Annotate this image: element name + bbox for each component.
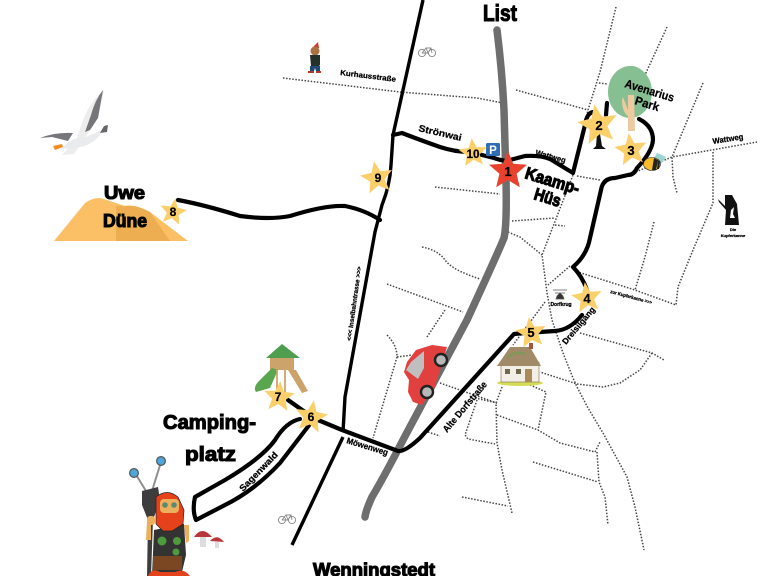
road label: Wattweg center: Wattweg [534,148,567,165]
heading: Avenarius Park: Avenarius [623,76,676,105]
star 5 [514,315,548,348]
star 3 [613,131,649,166]
star 10 [457,137,488,166]
icon: troll with staff [130,457,190,576]
label: Die Kupferkanne: Die [730,227,737,232]
road label: Wattweg right: Wattweg [712,132,744,146]
heading: Uwe Düne [103,183,147,231]
star 4: 4 [583,291,591,306]
heading: Avenarius Park: Park [633,93,661,114]
icon: Dorfkrug: Dorfkrug [550,302,572,308]
heading: Campingplatz: Camping- [163,412,256,434]
icon: child figure [308,42,321,73]
icon: seagull [40,90,108,155]
icon: bicycle top [418,48,436,57]
road label: Dreisilgang: Dreisilgang [560,305,597,346]
road label: Inselbahntrasse: <<< Inselbahntrasse >>> [346,266,363,341]
main road: grey road [365,30,506,517]
heading: Campingplatz [163,412,256,466]
icon: park tree [608,66,652,131]
star 6 [293,397,330,433]
icon: red car [404,345,447,405]
road label: Möwenweg: Möwenweg [345,435,389,457]
icon: bicycle bottom [278,515,296,524]
heading: List: List [483,0,517,26]
road label: Kurhausstraße: Kurhausstraße [340,68,396,84]
heading: Kaamp-Hüs: Hüs [532,185,563,211]
road label: zur Kupferkanne: zur Kupferkanne >>> [609,289,653,306]
star 4 [570,280,604,313]
heading: Kaamp-Hüs: Kaamp- [523,164,582,198]
heading: Campingplatz: platz [185,444,236,466]
icon: mushrooms [194,531,224,548]
star 8: 8 [170,205,177,219]
road label: Sagenwald: Sagenwald [237,450,280,493]
icon: parking sign [486,143,500,157]
road label: Alte Dorfstraße: Alte Dorfstraße [441,380,490,435]
star 7: 7 [275,390,282,404]
heading: Uwe Düne: Düne [103,211,147,231]
icon: playground tower [255,344,308,393]
star 1: 1 [504,164,512,179]
heading: Uwe Düne: Uwe [104,183,145,203]
icon: Dorfkrug [550,290,572,308]
icon: coffee pot [718,195,739,225]
star 10: 10 [466,147,480,161]
road label: Strönwai: Strönwai [417,123,463,144]
icon: thatched house [497,343,543,386]
icon: parking sign: P [489,145,497,157]
star 2 [575,101,621,145]
icon: monument [593,134,606,149]
star 9: 9 [375,171,382,185]
icon: bee [644,153,666,170]
star 3: 3 [627,143,635,158]
label: Die Kupferkanne [721,227,746,238]
label: Die Kupferkanne: Kupferkanne [721,233,746,238]
route line [178,103,653,520]
star 9 [358,158,395,194]
star 6: 6 [308,410,315,424]
star 2: 2 [595,118,603,133]
star 5: 5 [527,325,535,340]
star 8 [158,196,189,225]
cycle path: Inselbahn line [292,0,423,545]
icon: dune [54,198,188,241]
star 7 [263,380,296,411]
star 1 [489,151,527,187]
